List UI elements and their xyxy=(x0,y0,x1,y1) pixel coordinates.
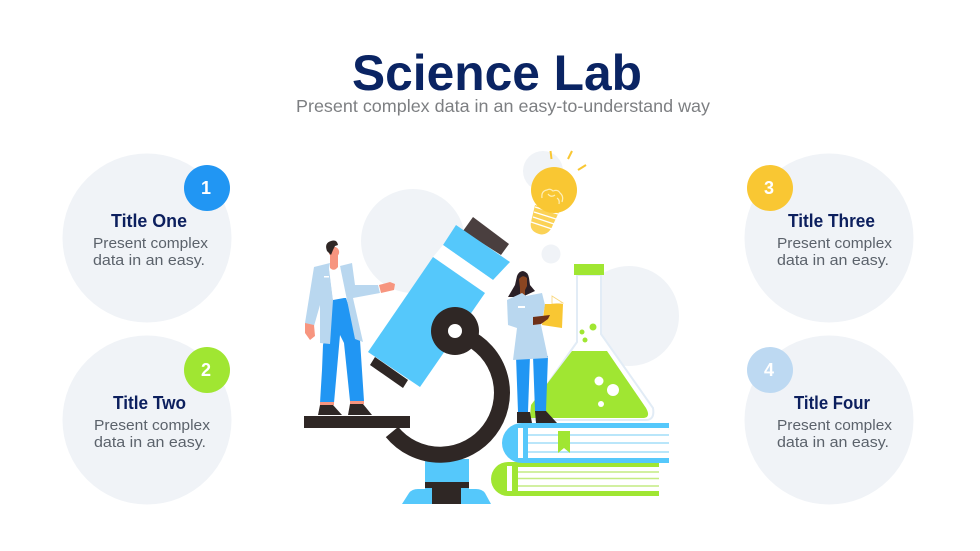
text: title four body: data in an easy. xyxy=(777,434,889,451)
badge 1 xyxy=(184,165,230,211)
illustration: science lab scene xyxy=(304,151,679,504)
panel: title two xyxy=(62,336,232,504)
text: title two body: data in an easy. xyxy=(94,434,206,451)
heading: title one: Title One xyxy=(111,211,187,231)
panel: title three xyxy=(744,154,914,322)
text: title two body xyxy=(94,417,211,451)
text: title one body xyxy=(93,235,209,269)
flask xyxy=(530,264,653,420)
text: title four body: Present complex xyxy=(777,417,893,434)
icon: light bulb xyxy=(531,151,586,234)
backdrop circles xyxy=(361,151,679,366)
woman scientist xyxy=(507,271,563,423)
badge 2: 2 xyxy=(201,360,211,380)
books xyxy=(491,423,669,496)
badge 3 xyxy=(747,165,793,211)
badge 4: 4 xyxy=(764,360,774,380)
text: title two body: Present complex xyxy=(94,417,211,434)
text: title three body: Present complex xyxy=(777,235,893,252)
badge 1: 1 xyxy=(201,178,211,198)
text: title three body: data in an easy. xyxy=(777,252,889,269)
badge 3: 3 xyxy=(764,178,774,198)
panel: title four xyxy=(744,336,914,504)
badge 2 xyxy=(184,347,230,393)
text: title four body xyxy=(777,417,893,451)
badge 4 xyxy=(747,347,793,393)
text: title one body: Present complex xyxy=(93,235,209,252)
heading: title two: Title Two xyxy=(113,393,186,413)
heading: title three: Title Three xyxy=(788,211,875,231)
subtitle: Present complex data in an easy-to-understand way xyxy=(296,96,710,116)
heading: title four: Title Four xyxy=(794,393,870,413)
text: title one body: data in an easy. xyxy=(93,252,205,269)
title: Science Lab xyxy=(352,45,642,101)
text: title three body xyxy=(777,235,893,269)
microscope xyxy=(304,217,510,504)
panel: title one xyxy=(62,154,232,322)
man scientist xyxy=(305,240,395,415)
